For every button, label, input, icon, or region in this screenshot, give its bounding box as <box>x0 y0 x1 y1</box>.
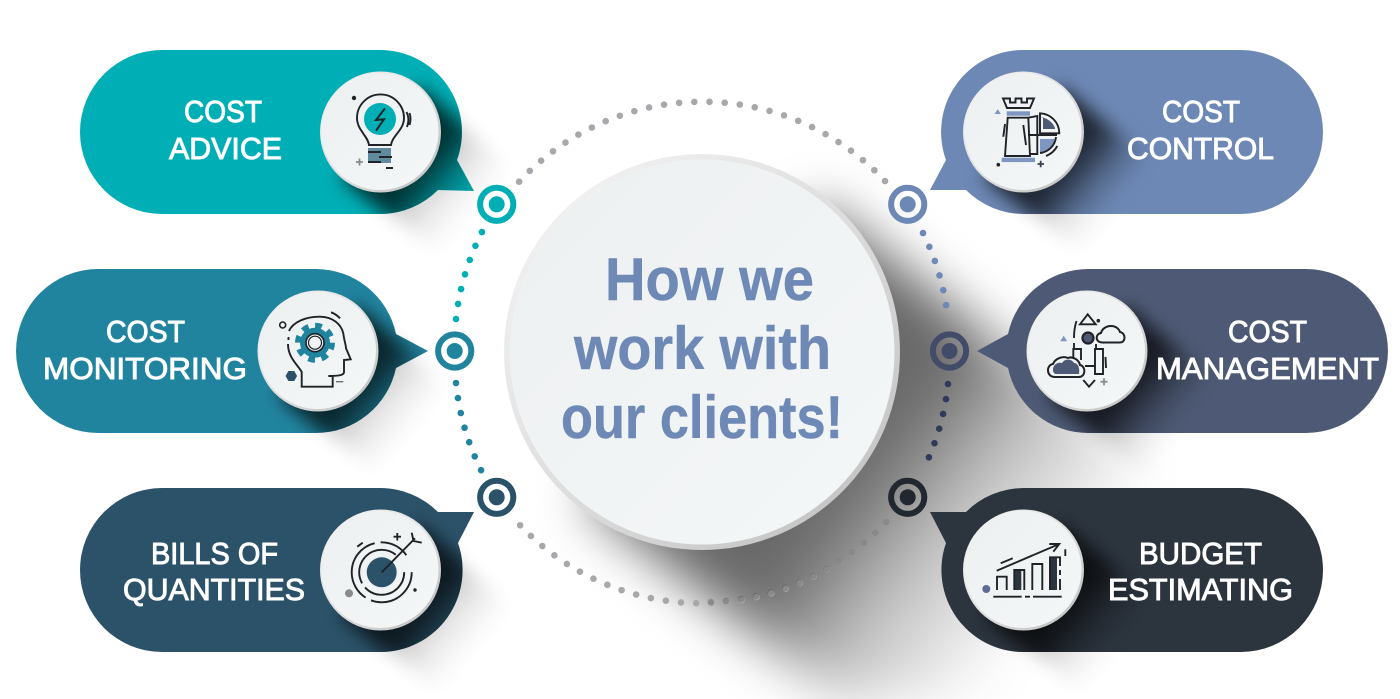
panel: cost control <box>930 50 1323 214</box>
node: cost advice <box>480 188 513 221</box>
panel: bills of quantities: QUANTITIES <box>123 572 305 607</box>
panel: cost monitoring: COST <box>106 314 185 349</box>
icon: target with arrow <box>345 533 422 602</box>
center circle <box>504 154 900 550</box>
panel: cost control: CONTROL <box>1127 131 1274 166</box>
panel: bills of quantities <box>80 488 474 652</box>
panel: cost monitoring <box>16 269 428 433</box>
panel: cost advice: ADVICE <box>169 131 282 166</box>
icon: rocket and clouds <box>1048 314 1124 387</box>
panel: budget estimating: BUDGET <box>1139 536 1262 571</box>
panel: budget estimating: ESTIMATING <box>1108 572 1293 607</box>
dotted ring <box>456 102 948 603</box>
panel: cost monitoring: MONITORING <box>43 351 247 386</box>
panel: bills of quantities: BILLS OF <box>151 536 278 571</box>
node: budget estimating <box>891 481 924 514</box>
title: How we <box>605 246 814 313</box>
icon: rising bar chart <box>982 544 1065 597</box>
node: cost control <box>891 188 924 221</box>
pill outer shadows <box>282 89 1219 693</box>
panel: cost advice <box>80 50 507 252</box>
icon: chess tower and pie chart <box>994 98 1059 167</box>
center circle long shadow <box>585 202 1158 699</box>
panel: cost control: COST <box>1162 94 1240 129</box>
node: bills of quantities <box>480 481 513 514</box>
panel: cost management: COST <box>1228 314 1307 349</box>
title <box>561 246 843 451</box>
title: work with <box>573 315 831 382</box>
dark overlay for ring dots within shadow <box>700 522 886 602</box>
panel: budget estimating <box>930 488 1323 652</box>
panel: cost management <box>977 269 1388 433</box>
node: cost management <box>933 334 966 368</box>
panel: cost management: MANAGEMENT <box>1156 351 1379 386</box>
icon: light bulb <box>352 94 410 168</box>
title: our clients! <box>561 384 843 451</box>
icon: head with gear <box>280 312 351 387</box>
node: cost monitoring <box>438 334 471 368</box>
panel: cost advice: COST <box>184 94 262 129</box>
